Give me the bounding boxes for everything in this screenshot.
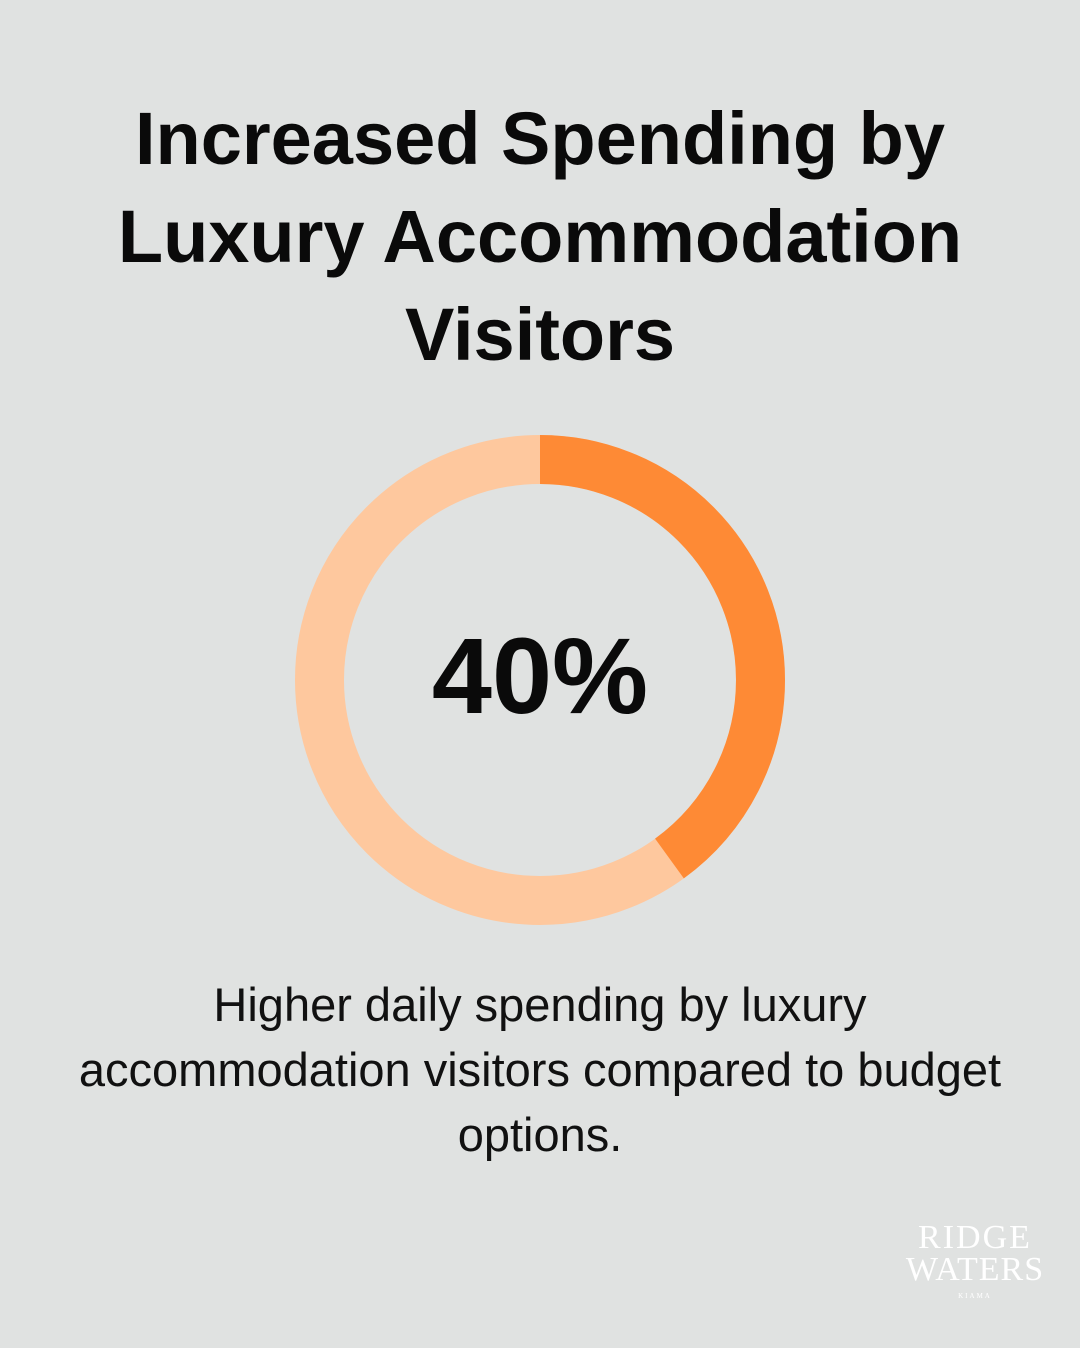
description: accommodation visitors compared to budget xyxy=(79,1043,1001,1096)
logo: WATERS xyxy=(906,1251,1044,1288)
description: options. xyxy=(458,1108,622,1161)
description: Higher daily spending by luxury xyxy=(213,978,867,1031)
description xyxy=(79,978,1001,1161)
logo: RIDGE xyxy=(918,1219,1032,1256)
title xyxy=(118,97,962,376)
title: Increased Spending by xyxy=(135,97,945,180)
donut chart: 40% xyxy=(432,615,648,736)
title: Visitors xyxy=(405,293,675,376)
logo: KIAMA xyxy=(958,1292,992,1300)
logo xyxy=(906,1219,1044,1300)
title: Luxury Accommodation xyxy=(118,195,962,278)
